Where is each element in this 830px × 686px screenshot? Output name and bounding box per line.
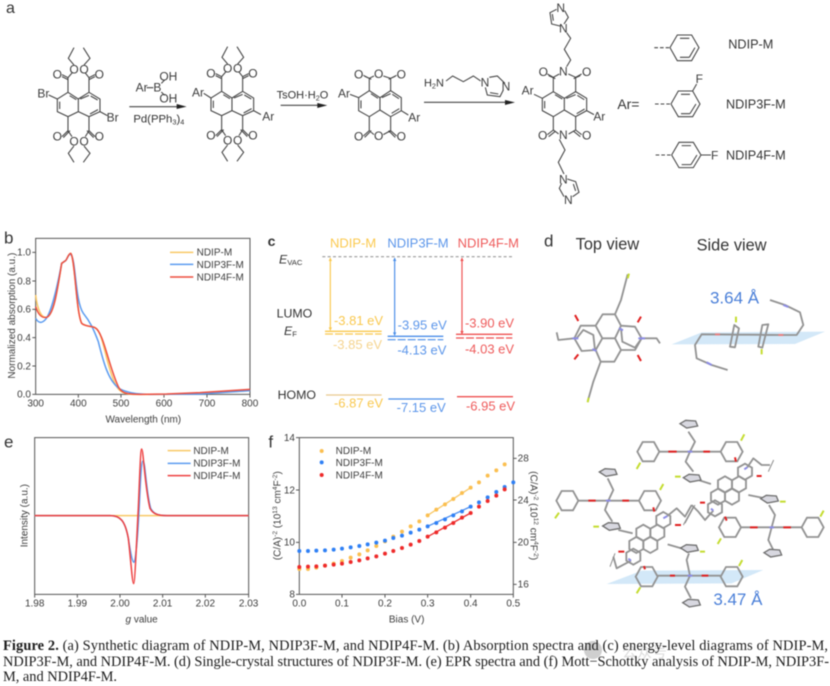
x tick labels: 0.2 [378, 599, 392, 610]
3-fluorophenyl group: F [696, 72, 703, 86]
NDIP3F-M levels: -3.95 eV [398, 318, 447, 333]
x tick labels [27, 399, 259, 410]
y tick labels: 0.0 [17, 390, 31, 401]
reaction arrow 3 with amine reagent: 2 [432, 82, 436, 91]
legend: NDIP-M [193, 446, 229, 457]
NDIP3F-M levels: -4.13 eV [397, 342, 447, 357]
reaction arrow 3 with amine reagent: N [502, 80, 510, 94]
panel b: absorption spectra [4, 228, 259, 426]
right y axis title: -2 [532, 494, 539, 501]
diaryl tetraester molecule [192, 47, 274, 161]
final NDI molecule: O [582, 128, 591, 142]
dianhydride molecule: O [354, 130, 363, 144]
right y tick labels: 28 [518, 454, 529, 465]
NDIP4F-M data points [299, 489, 505, 567]
dibromo tetraester starting molecule: O [95, 130, 104, 144]
x tick labels: 2.02 [196, 599, 215, 610]
right y tick labels: 16 [518, 580, 529, 591]
x tick labels: 2.03 [239, 599, 259, 610]
chart axes [35, 438, 249, 598]
diaryl tetraester molecule: O [223, 133, 232, 147]
right y axis title: (10 [528, 500, 539, 518]
right y axis title: -2 [532, 551, 539, 557]
reaction arrow 3 with amine reagent: N [481, 76, 489, 90]
reaction arrow 1 with reagents: 4 [180, 117, 184, 126]
heading: side view: Side view [697, 237, 767, 255]
dibromo tetraester starting molecule: O [79, 62, 89, 76]
label a: a [6, 0, 15, 17]
chart axes [32, 238, 250, 398]
label f: f [268, 433, 273, 452]
diaryl tetraester molecule: O [223, 61, 232, 75]
final NDI molecule [522, 1, 605, 207]
x tick labels: 500 [113, 399, 130, 410]
dianhydride molecule: O [354, 68, 363, 82]
dibromo tetraester starting molecule: O [53, 130, 62, 144]
dianhydride molecule: Ar [338, 86, 350, 100]
legend [320, 446, 383, 481]
y tick labels [17, 248, 31, 401]
packing molecules [555, 420, 824, 607]
legend: NDIP-M [336, 446, 371, 457]
right y axis title: cm [528, 525, 539, 541]
label c: c [268, 233, 276, 249]
dianhydride molecule: O [397, 130, 406, 144]
legend: NDIP4F-M [193, 471, 240, 482]
x tick labels: 0.1 [335, 599, 349, 610]
reaction arrow 1 with reagents: B [153, 81, 161, 95]
figure caption: M, and NDIP4F-M. [3, 669, 117, 685]
final NDI molecule: N [559, 128, 568, 142]
x tick labels: 700 [199, 399, 216, 410]
level labels: VAC [287, 258, 303, 267]
watermark [584, 641, 667, 661]
x axis title: Bias (V) [389, 614, 424, 625]
dibromo tetraester starting molecule: Br [107, 111, 119, 125]
diaryl tetraester molecule: O [248, 129, 258, 143]
panel d: single crystal structures [544, 232, 825, 402]
final NDI molecule: O [538, 128, 547, 142]
right y tick labels: 24 [518, 495, 529, 506]
final NDI molecule: Ar [522, 84, 534, 98]
x tick labels: 0.5 [506, 599, 521, 610]
legend: NDIP-M [197, 248, 232, 259]
diaryl tetraester molecule: O [206, 67, 216, 81]
right y tick labels: 20 [518, 538, 529, 549]
diaryl tetraester molecule: Ar [192, 85, 204, 99]
diaryl tetraester molecule: Ar [262, 110, 274, 124]
x tick labels: 0.4 [464, 599, 478, 610]
reaction arrow 2 with TsOH: O [320, 89, 329, 101]
NDIP-M levels: -3.85 eV [333, 337, 382, 352]
x tick labels: 1.98 [25, 599, 45, 610]
right y tick labels [518, 454, 529, 591]
left y axis title: -2 [272, 474, 279, 480]
dibromo tetraester starting molecule: O [95, 68, 104, 82]
NDIP4F-M levels: -6.95 eV [466, 398, 515, 413]
left y axis title: (C/A) [272, 537, 283, 560]
side view molecule [695, 300, 803, 370]
reaction arrow 1 with reagents: Ar [136, 81, 148, 95]
Ar substituent legend [617, 35, 786, 168]
final NDI molecule: N [559, 173, 568, 187]
label NDIP3F-M: NDIP3F-M [726, 97, 786, 111]
4-fluorophenyl group: F [711, 148, 718, 162]
NDIP3F-M data points [299, 482, 513, 551]
final NDI molecule: Ar [593, 110, 605, 124]
x tick labels: 0.3 [421, 599, 435, 610]
left y tick labels [284, 433, 295, 601]
dibromo tetraester starting molecule: O [53, 68, 62, 82]
reaction arrow 1 with reagents [129, 70, 187, 126]
final NDI molecule: N [559, 64, 568, 78]
packing stacking plane [607, 570, 763, 584]
panel c: energy level diagram [268, 233, 519, 415]
dianhydride molecule: O [397, 68, 406, 82]
absorption curves [36, 253, 250, 394]
reaction arrow 3 with amine reagent [424, 76, 515, 105]
level labels [277, 252, 316, 402]
left y axis title: ) [272, 471, 283, 474]
label NDIP-M: NDIP-M [728, 38, 773, 52]
diaryl tetraester molecule: O [248, 67, 258, 81]
x tick labels: 1.99 [68, 599, 87, 610]
NDIP-M levels [325, 257, 383, 411]
dianhydride molecule: Ar [408, 111, 420, 125]
dibromo tetraester starting molecule: O [79, 134, 89, 148]
level labels: F [292, 330, 297, 339]
x axis title: g value [126, 615, 158, 626]
y axis title: Intensity (a.u.) [19, 484, 30, 547]
y tick labels: 1.0 [17, 248, 31, 259]
NDIP-M levels: -6.87 eV [334, 396, 383, 411]
reaction arrow 1 with reagents: OH [159, 70, 177, 84]
right y axis title: (C/A) [528, 471, 539, 494]
level labels: E [284, 324, 292, 338]
figure caption: Figure 2. (a) Synthetic diagram of NDIP-M, NDIP3F-M, and NDIP4F-M. (b) Absorption spectra and (c) energy-level diagrams of NDIP-M, [3, 638, 828, 654]
left y axis title: (10 [272, 513, 283, 531]
y tick labels: 0.4 [17, 333, 31, 344]
3-fluorophenyl group [655, 72, 703, 117]
x tick labels: 2.01 [153, 599, 173, 610]
legend: NDIP4F-M [336, 470, 383, 481]
dibromo tetraester starting molecule: O [69, 134, 79, 148]
x tick labels: 0.0 [292, 599, 307, 610]
label d: d [544, 232, 553, 251]
figure caption: NDIP3F-M, and NDIP4F-M. (d) Single-crystal structures of NDIP3F-M. (e) EPR spectra and (f) Mott−Schottky analysis of NDIP-M, NDIP3F- [3, 654, 829, 670]
NDIP-M levels: -3.81 eV [334, 313, 383, 328]
reaction arrow 3 with amine reagent: H [424, 78, 432, 90]
x tick labels: 800 [242, 399, 259, 410]
level labels: HOMO [278, 388, 316, 402]
dianhydride molecule [338, 67, 420, 144]
label e: e [4, 433, 13, 452]
y tick labels: 0.8 [17, 276, 31, 287]
diaryl tetraester molecule: O [233, 61, 242, 75]
reaction arrow 1 with reagents: OH [159, 91, 177, 105]
crystal packing structure [555, 420, 824, 609]
4-fluorophenyl group [656, 142, 718, 168]
left y axis title: 13 [272, 506, 279, 514]
right y axis title: F [528, 545, 539, 551]
Ar substituent legend: Ar= [617, 96, 639, 112]
x tick labels: 300 [27, 399, 44, 410]
right y axis title: ) [528, 557, 539, 560]
watermark: 公众号 [622, 644, 667, 661]
left y tick labels: 12 [284, 485, 295, 496]
left y tick labels: 14 [284, 433, 295, 444]
legend [170, 248, 244, 283]
x tick labels [25, 599, 259, 610]
panel a: synthetic diagram [6, 0, 786, 207]
heading: top view: Top view [576, 235, 639, 253]
left y tick labels: 10 [284, 538, 295, 549]
reaction arrow 2 with TsOH: TsOH·H [277, 89, 316, 101]
y tick labels: 0.6 [17, 305, 31, 316]
fit lines [428, 488, 471, 537]
x tick labels: 400 [70, 399, 87, 410]
final NDI molecule: O [539, 65, 548, 79]
reaction arrow 2 with TsOH: 2 [316, 93, 320, 102]
x tick labels: 600 [156, 399, 173, 410]
legend: NDIP4F-M [197, 272, 244, 283]
right y axis title: 12 [532, 518, 539, 525]
legend: NDIP3F-M [336, 458, 383, 469]
phenyl group [654, 35, 699, 61]
NDIP-M data points [299, 464, 505, 569]
NDIP4F-M levels: -4.03 eV [465, 342, 514, 357]
legend: NDIP3F-M [197, 260, 244, 271]
label b: b [4, 228, 13, 247]
NDIP4F-M levels: -3.90 eV [465, 316, 514, 331]
legend [168, 446, 240, 482]
final NDI molecule: O [582, 65, 591, 79]
top view molecule [557, 274, 660, 402]
series headings: NDIP4F-M [458, 235, 519, 250]
left y axis title: cm [272, 490, 283, 506]
x tick labels [292, 599, 521, 610]
x axis title: Wavelength (nm) [105, 415, 181, 426]
dianhydride molecule: O [374, 67, 383, 81]
label NDIP4F-M: NDIP4F-M [726, 148, 786, 162]
EPR curves [35, 449, 249, 584]
dibromo tetraester starting molecule [37, 48, 119, 162]
x tick labels: 2.00 [110, 599, 130, 610]
y tick labels: 0.2 [17, 361, 31, 372]
diaryl tetraester molecule: O [233, 133, 242, 147]
reaction arrow 2 with TsOH [277, 89, 329, 108]
figure caption [3, 638, 829, 685]
NDIP4F-M levels [456, 257, 515, 413]
series headings: NDIP-M [330, 235, 376, 250]
reaction arrow 1 with reagents: ) [176, 113, 180, 125]
level labels: E [279, 252, 287, 266]
left y axis title: -2 [272, 531, 279, 537]
right y axis title: 4 [532, 541, 539, 545]
NDIP3F-M levels: -7.15 eV [397, 400, 446, 415]
left y axis title: F [272, 480, 283, 487]
dianhydride molecule: O [374, 129, 383, 143]
level labels: LUMO [277, 306, 312, 320]
distance label 3.64 A: 3.64 Å [710, 289, 760, 308]
final NDI molecule: N [564, 193, 573, 207]
vacuum level [322, 255, 513, 258]
series headings: NDIP3F-M [387, 235, 449, 250]
dibromo tetraester starting molecule: Br [37, 87, 49, 101]
left y tick labels: 8 [289, 590, 295, 601]
legend: NDIP3F-M [193, 459, 240, 470]
final NDI molecule: N [559, 21, 568, 35]
final NDI molecule: N [556, 1, 565, 15]
chart axes [296, 438, 517, 598]
panel f: Mott-Schottky analysis [268, 433, 539, 625]
series headings [330, 235, 519, 250]
dibromo tetraester starting molecule: O [69, 62, 79, 76]
diaryl tetraester molecule: O [206, 129, 216, 143]
distance label 3.47 A: 3.47 Å [713, 590, 763, 609]
panel e: EPR spectra [4, 433, 259, 626]
left y axis title: 4 [272, 486, 279, 490]
y axis title: Normalized absorption (a.u.) [7, 253, 18, 379]
side view stacking plane [672, 332, 825, 344]
reaction arrow 1 with reagents: Pd(PPh [133, 113, 172, 125]
reaction arrow 3 with amine reagent: N [436, 78, 444, 90]
NDIP3F-M levels [388, 257, 447, 415]
reaction arrow 1 with reagents: 3 [172, 117, 176, 126]
